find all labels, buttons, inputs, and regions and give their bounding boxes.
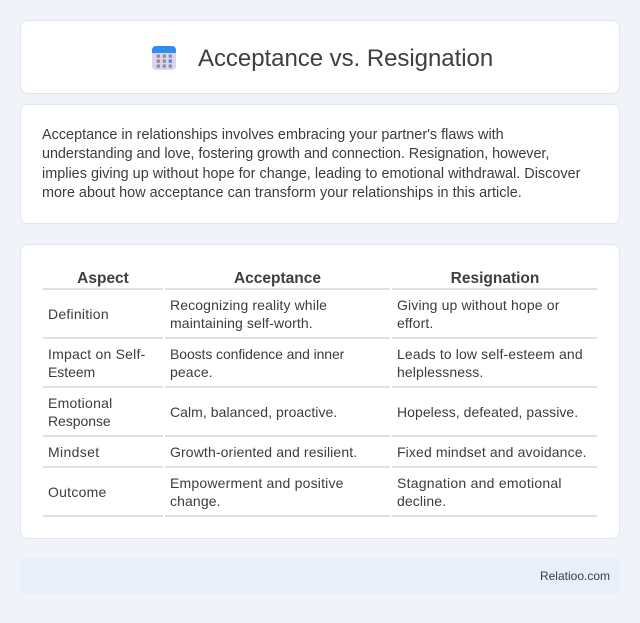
row: emotional response: Response — [48, 413, 111, 429]
row: definition: Giving up without hope or — [397, 297, 560, 313]
row: outcome: Stagnation and emotional — [397, 475, 562, 491]
intro text: more about how acceptance can transform your relationships in this article. — [42, 185, 522, 201]
footer bar — [20, 559, 620, 593]
row: outcome — [48, 475, 562, 509]
row: emotional response: Emotional — [48, 395, 113, 411]
row: impact on self-esteem: peace. — [170, 364, 213, 380]
row: emotional response: Hopeless, defeated, passive. — [397, 404, 578, 420]
table header: Resignation — [451, 270, 539, 287]
footer source text: Relatioo.com — [540, 569, 610, 583]
row: definition — [48, 297, 560, 331]
row: definition: Definition — [48, 306, 109, 322]
row: definition: Recognizing reality while — [170, 297, 327, 313]
row: emotional response — [48, 395, 578, 429]
row: definition: effort. — [397, 315, 433, 331]
row: impact on self-esteem: Esteem — [48, 364, 95, 380]
table header: Acceptance — [234, 270, 321, 287]
row: outcome: change. — [170, 493, 221, 509]
intro text: implies giving up without hope for change, leading to emotional withdrawal. Discover — [42, 166, 580, 182]
row: mindset: Mindset — [48, 444, 99, 460]
table header — [77, 270, 539, 287]
panel: comparison table — [20, 244, 620, 539]
title: Acceptance vs. Resignation — [198, 45, 493, 72]
intro text: Acceptance in relationships involves embracing your partner's flaws with — [42, 127, 504, 143]
row: impact on self-esteem — [48, 346, 583, 380]
row: impact on self-esteem: Leads to low self-esteem and — [397, 346, 583, 362]
panel: introduction — [20, 104, 620, 224]
row: outcome: Outcome — [48, 484, 107, 500]
intro text — [42, 127, 580, 201]
intro text: understanding and love, fostering growth and connection. Resignation, however, — [42, 146, 549, 162]
row: impact on self-esteem: Boosts confidence and inner — [170, 346, 344, 362]
row: emotional response: Calm, balanced, proactive. — [170, 404, 337, 420]
icon: calendar — [152, 46, 176, 70]
row: mindset: Fixed mindset and avoidance. — [397, 444, 587, 460]
row: impact on self-esteem: Impact on Self- — [48, 346, 145, 362]
row: outcome: Empowerment and positive — [170, 475, 344, 491]
row: impact on self-esteem: helplessness. — [397, 364, 483, 380]
table header: Aspect — [77, 270, 129, 287]
row: mindset: Growth-oriented and resilient. — [170, 444, 357, 460]
row: definition: maintaining self-worth. — [170, 315, 313, 331]
row: mindset — [48, 444, 587, 460]
panel: title card — [20, 20, 620, 94]
row: outcome: decline. — [397, 493, 446, 509]
